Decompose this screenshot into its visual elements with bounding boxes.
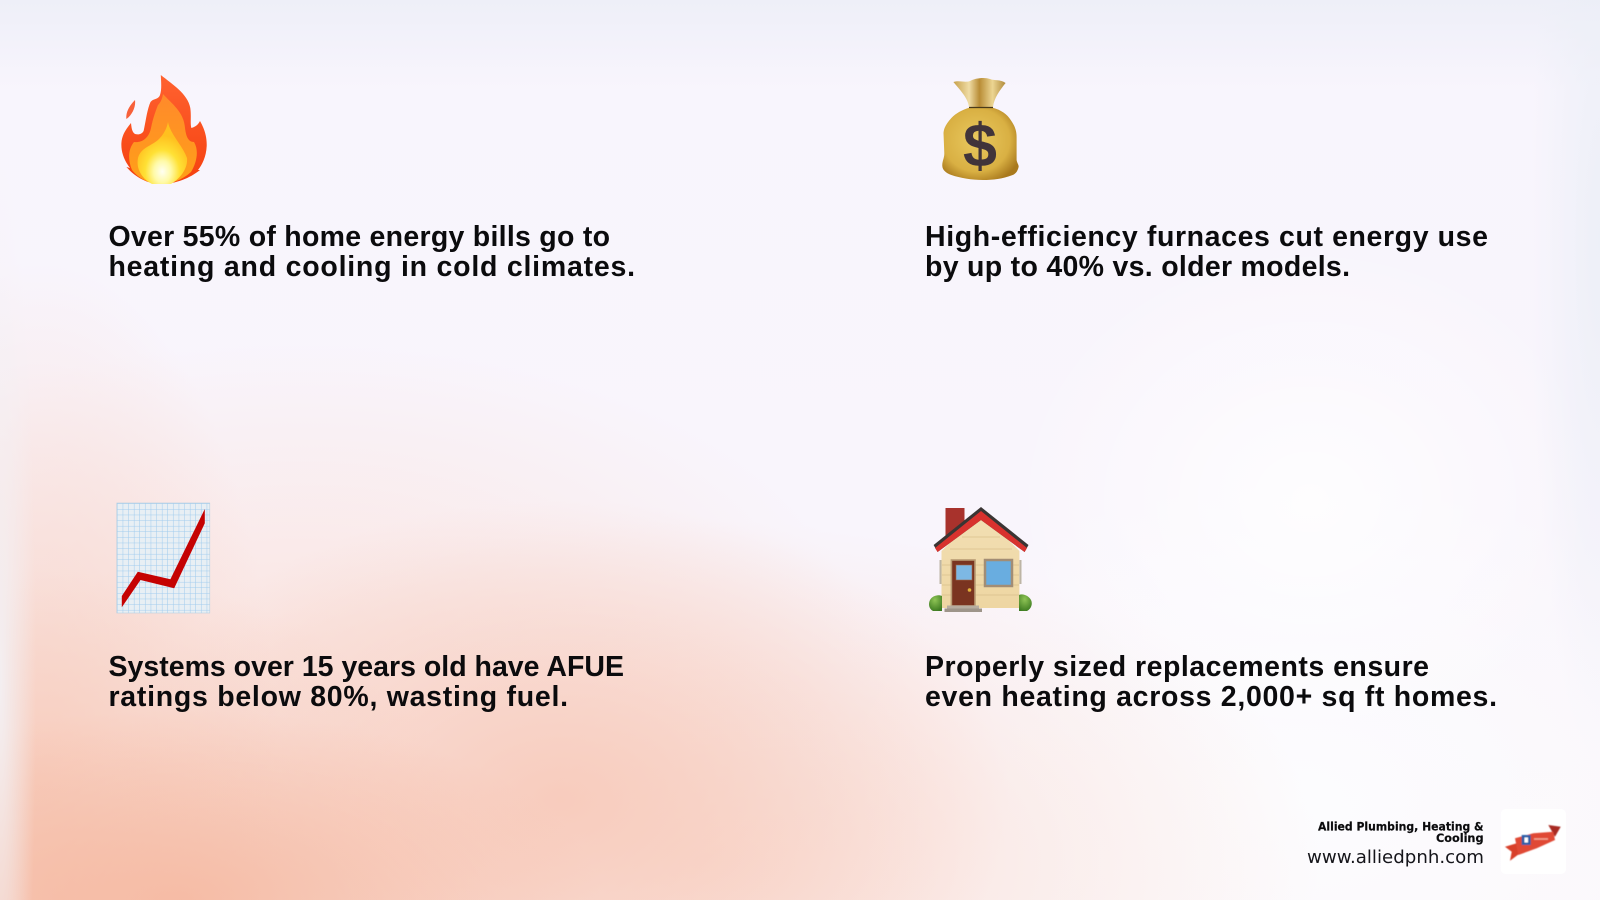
- text: company name: Cooling: [1436, 831, 1484, 845]
- icon: money bag: $: [963, 112, 997, 180]
- panel: heating and cooling share: [108, 75, 635, 283]
- text: efficiency savings: by up to 40% vs. older models.: [925, 251, 1350, 283]
- text: efficiency savings: High-efficiency furnaces cut energy use: [925, 221, 1488, 253]
- text: heating and cooling share: heating and cooling in cold climates.: [108, 251, 635, 283]
- text: company name: Allied Plumbing, Heating &: [1318, 820, 1484, 834]
- text: old system ratings: Systems over 15 years old have AFUE: [108, 651, 624, 683]
- text: proper sizing: even heating across 2,000+ sq ft homes.: [925, 681, 1497, 713]
- text: heating and cooling share: Over 55% of home energy bills go to: [108, 221, 610, 253]
- text: proper sizing: Properly sized replacements ensure: [925, 651, 1429, 683]
- text: website: www.alliedpnh.com: [1307, 847, 1484, 868]
- logo: ribbon badge: [1501, 809, 1566, 874]
- footer: company branding: [1307, 809, 1566, 874]
- panel: efficiency savings: [925, 78, 1488, 283]
- icon: rising chart: [117, 503, 210, 613]
- panel: proper sizing: [925, 507, 1497, 713]
- text: old system ratings: ratings below 80%, wasting fuel.: [108, 681, 568, 713]
- panel: old system ratings: [108, 503, 624, 713]
- icon: fire: [121, 75, 207, 184]
- icon: money bag: [942, 78, 1019, 180]
- icon: house: [929, 507, 1032, 612]
